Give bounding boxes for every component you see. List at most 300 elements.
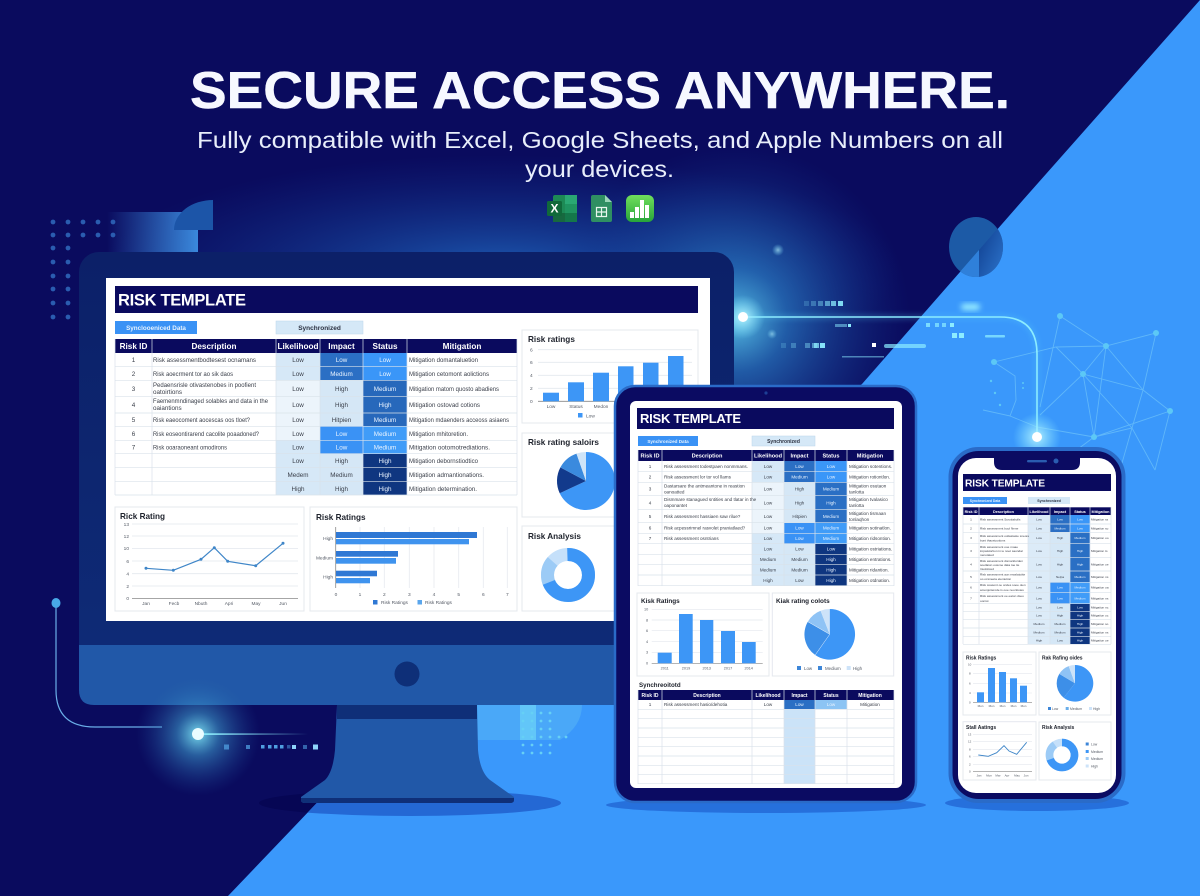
tablet risk table: Low: [764, 475, 773, 480]
phone bar chart panel: 0: [969, 700, 971, 704]
tablet risk table: oanoatted: [664, 490, 685, 494]
data particles: [767, 244, 1005, 358]
tablet risk table: Dismmare stanagued sntities and tlatar in the: [664, 497, 757, 502]
phone risk table: 2: [970, 526, 972, 530]
decoration: left connector line: [52, 598, 162, 727]
horizontal bar chart panel: Risk Ratings: Risk Ratings: [381, 600, 409, 606]
risk table: Mitigation ootomotrediations.: [409, 444, 490, 452]
phone donut chart panel: High: [1091, 764, 1098, 768]
tablet risk table: Low: [827, 547, 836, 552]
phone tag: synchronized: Synchronized: [1037, 499, 1061, 503]
risk table: Low: [292, 444, 304, 452]
phone risk table: risoloticed: [980, 567, 994, 571]
risk table: Medem: [288, 472, 308, 479]
tablet risk table: 5: [649, 514, 652, 519]
phone risk table: Low: [1057, 518, 1064, 522]
tablet risk table: Low: [764, 526, 773, 531]
monitor chin: [79, 645, 734, 705]
background glow behind monitor: [60, 140, 920, 500]
tablet risk table: Medium: [791, 475, 808, 480]
phone risk table: Low: [1057, 606, 1064, 610]
phone risk table: Description: [993, 510, 1015, 514]
tablet risk table: High: [795, 487, 805, 492]
risk table: High: [335, 402, 348, 409]
risk table: Low: [292, 458, 304, 465]
phone risk table: Mitigation so: [1091, 526, 1109, 530]
phone pie chart panel: Rak Rafing oides: [1042, 656, 1083, 662]
tablet bar chart panel: Kisk Ratings: [641, 598, 680, 605]
tablet risk table: Low: [764, 464, 773, 469]
risk table: Mitigation ostovad cotions: [409, 402, 480, 409]
tablet risk table: 3: [649, 487, 652, 492]
phone risk table: Low: [1036, 606, 1043, 610]
phone pie chart panel: Medium: [1070, 707, 1082, 711]
decoration: quarter circle: [174, 200, 213, 230]
tablet risk table: High: [826, 500, 836, 505]
tablet risk table: Dastarsare the antmeantone in reastion: [664, 484, 745, 488]
phone donut chart panel: Risk Analysis: [1042, 725, 1075, 731]
phone risk table: Risk assessment ooe moae: [980, 545, 1018, 549]
phone risk table: 3: [970, 536, 972, 540]
phone pie chart panel: [1039, 652, 1111, 715]
phone line chart panel: 8: [969, 747, 971, 751]
risk table: [115, 339, 517, 495]
risk table: Medium: [374, 386, 396, 393]
phone risk table: Mitigation ns: [1091, 575, 1109, 579]
line chart panel: Risk Rating: Nbuth: [195, 601, 208, 607]
tag: synchronized data: [115, 321, 197, 334]
phone risk table: Medium: [1054, 526, 1066, 530]
horizontal bar chart panel: Risk Ratings: [310, 507, 517, 611]
phone risk table: Low: [1036, 614, 1043, 618]
tablet risk table: Low: [795, 464, 804, 469]
phone risk table: Low: [1077, 606, 1084, 610]
subtitle: your devices.: [525, 156, 674, 182]
phone bar chart panel: Mon: [1011, 704, 1017, 708]
phone risk table: Risk assessment ooliastasie sneore: [980, 534, 1029, 538]
phone risk table: Low: [1057, 586, 1064, 590]
phone bar chart panel: Mon: [978, 704, 984, 708]
phone risk table: High: [1057, 562, 1063, 566]
phone tag: synchronized data: [963, 497, 1007, 504]
phone line chart panel: Apr: [1005, 774, 1009, 778]
phone risk table: Mitigation oa: [1091, 586, 1109, 590]
risk table: Mitigation mdaenders acceoss asiaens: [409, 417, 509, 424]
tablet risk table: Mitigation tvalasico: [849, 497, 888, 502]
risk table: Medium: [374, 417, 396, 424]
tablet risk table: Low: [795, 578, 804, 583]
tablet bar chart panel: 8: [646, 618, 648, 622]
risk table: Low: [292, 417, 304, 424]
phone: [950, 449, 1124, 801]
phone bar chart panel: 8: [969, 672, 971, 676]
risk table: High: [379, 458, 392, 465]
decoration: split pie top right: [949, 217, 1003, 277]
stand shadow: [308, 793, 561, 816]
tablet shadow: [606, 797, 926, 813]
tablet risk table: Risk acpessrimnel rasvolet praniatlaed?: [664, 526, 746, 531]
phone risk table: Mitigation so: [1091, 622, 1109, 626]
phone body: [950, 449, 1124, 801]
risk table: Low: [292, 371, 304, 378]
network lines: [983, 316, 1170, 470]
phone line chart panel: Mar: [995, 774, 1001, 778]
tablet second table: [638, 690, 894, 784]
tablet risk table: Low: [764, 536, 773, 541]
tablet risk table: Risk assessment osntrians: [664, 536, 719, 541]
phone risk table: Risk ID: [965, 510, 978, 514]
phone bar chart panel: [963, 652, 1036, 715]
phone line chart panel: May: [1014, 774, 1020, 778]
decoration: light shape with dots near stand: [448, 705, 582, 754]
tablet second table: Low: [827, 702, 836, 707]
tablet bar chart panel: 6: [646, 629, 648, 633]
line chart panel: Risk Rating: 4: [126, 572, 129, 578]
tablet risk table: tanlotta: [849, 490, 865, 494]
column chart panel: Risk ratings: 6: [530, 360, 533, 366]
risk table: High: [379, 486, 392, 493]
risk table: Mitigation debornstiodtico: [409, 458, 478, 465]
phone line chart panel: 6: [969, 755, 971, 759]
phone risk table: Medium: [1074, 536, 1086, 540]
phone risk table: High: [1077, 549, 1083, 553]
tablet risk table: Medium: [823, 487, 839, 492]
risk table: 3: [132, 386, 136, 393]
tablet risk table: Low: [827, 475, 836, 480]
tablet risk table: Medium: [823, 536, 839, 541]
tablet bar chart panel: 2017: [724, 666, 732, 670]
phone risk table: High: [1077, 562, 1083, 566]
tablet second table: Impact: [791, 693, 808, 699]
phone donut chart panel: [1039, 722, 1111, 780]
subtitle: Fully compatible with Excel, Google Sheets, and Apple Numbers on all: [197, 127, 1003, 153]
risk table: Low: [336, 357, 348, 364]
tablet risk table: Low: [795, 536, 804, 541]
phone risk table: Medium: [1054, 622, 1066, 626]
column chart panel: Risk ratings: [522, 330, 698, 423]
phone risk table: Low: [1057, 638, 1064, 642]
donut chart panel: Risk Analysis: [522, 526, 698, 611]
tablet risk table: Mitigation rotiontlon.: [849, 475, 890, 480]
phone risk table: Low: [1077, 526, 1084, 530]
tablet screen: [630, 401, 902, 788]
monitor bezel: [79, 252, 734, 705]
phone bar chart panel: Mon: [1000, 704, 1006, 708]
tablet risk table: Mitigation otdnation.: [849, 578, 890, 583]
phone line chart panel: 12: [968, 740, 972, 744]
tablet bar chart panel: [637, 593, 769, 676]
tablet tag: synchronized data: [638, 436, 698, 446]
tablet second table: Low: [764, 702, 773, 707]
risk table: Mitigation mhitoretion.: [409, 431, 468, 438]
phone risk table: 5: [970, 575, 972, 579]
tablet second table: Mitigation: [858, 693, 882, 699]
risk table: Low: [292, 386, 304, 393]
tablet risk table: Mitigation: [857, 454, 884, 460]
phone screen: [958, 458, 1116, 793]
icon: Excel: [547, 195, 577, 222]
phone risk table: Mitigation oo: [1091, 536, 1109, 540]
phone line chart panel: Stall Aatings: [966, 725, 996, 731]
tablet bar chart panel: 0: [646, 662, 648, 666]
phone line chart panel: 13: [968, 732, 972, 736]
horizontal bar chart panel: Risk Ratings: 7: [506, 592, 509, 598]
risk table: Mitigation domantaluetion: [409, 357, 478, 364]
tablet risk table: Mitigation ostriations.: [849, 547, 892, 552]
phone risk table: Risk assessment bool Nene: [980, 526, 1019, 530]
tablet risk table: High: [826, 557, 836, 562]
risk table: Description: [191, 342, 237, 351]
tablet risk table: High: [826, 578, 836, 583]
phone risk table: Low: [1036, 518, 1043, 522]
tablet risk table: Risk assessment hassiaen saw rilue?: [664, 514, 741, 519]
phone line chart panel: 0: [969, 770, 971, 774]
pie chart panel: Risk rating saloirs: [522, 433, 698, 517]
tablet risk table: 4: [649, 500, 652, 505]
phone risk table: High: [1077, 638, 1083, 642]
risk table: Low: [379, 371, 391, 378]
tablet risk table: Medium: [823, 526, 839, 531]
phone risk table: High: [1057, 549, 1063, 553]
phone risk table: Low: [1077, 518, 1084, 522]
horizontal bar chart panel: Risk Ratings: 5: [457, 592, 460, 598]
phone risk table: Status: [1074, 510, 1086, 514]
phone bar chart panel: Mon: [1021, 704, 1027, 708]
tablet risk table: Low: [764, 547, 773, 552]
risk table: Likelihood: [278, 342, 318, 351]
tablet risk table: Mitigation ridsontion.: [849, 536, 891, 541]
risk table: Mitigation cetomont aolictions: [409, 371, 489, 378]
tablet second table: Status: [823, 693, 839, 699]
phone line chart panel: 2: [969, 762, 971, 766]
phone risk table: soetlaion ouscoe data toe tie: [980, 563, 1020, 567]
phone pie chart panel: High: [1093, 707, 1100, 711]
tablet risk table: Description: [692, 454, 723, 460]
phone risk table: Low: [1036, 596, 1043, 600]
tablet risk table: 2: [649, 475, 652, 480]
phone risk table: Mitigation ss: [1091, 518, 1109, 522]
phone risk table: Mitigation ts: [1091, 549, 1108, 553]
tag: synchronized: [276, 321, 363, 334]
phone risk table: Mitigation nc: [1091, 606, 1109, 610]
phone risk table: Mitigation ns: [1091, 596, 1109, 600]
tablet bar chart panel: 4: [646, 640, 648, 644]
line chart panel: Risk Rating: 2: [126, 584, 129, 590]
line chart panel: Risk Rating: Fecb: [169, 601, 180, 607]
tablet risk table: oaponantet: [664, 503, 688, 508]
risk table: Low: [292, 402, 304, 409]
tablet second table: Low: [795, 702, 804, 707]
phone risk table: Medium: [1074, 586, 1086, 590]
phone risk table: Mitigation oc: [1091, 614, 1109, 618]
tablet second table: Description: [693, 693, 721, 699]
phone risk table: Low: [1036, 562, 1043, 566]
phone risk table: High: [1077, 622, 1083, 626]
phone risk table: Low: [1057, 596, 1064, 600]
tablet risk table: Low: [795, 526, 804, 531]
tablet risk table: Hitpien: [792, 514, 807, 519]
phone bar chart panel: Mon: [989, 704, 995, 708]
phone risk table: Medium: [1033, 630, 1045, 634]
subtitle: [197, 127, 1003, 182]
tablet risk table: Medium: [760, 568, 776, 572]
risk table: Medium: [330, 472, 353, 479]
tablet second table: Risk ID: [642, 693, 659, 699]
column chart panel: Risk ratings: 4: [530, 373, 533, 379]
icon: Excel: X: [550, 202, 559, 216]
tablet tag: synchronized data: Synchronized Data: [647, 439, 689, 444]
tablet pie chart panel: [772, 593, 894, 676]
phone risk table: 6: [970, 586, 972, 590]
tablet body: [615, 386, 916, 802]
phone risk table: oo ocsneeta etenietion: [980, 577, 1011, 581]
line chart panel: Risk Rating: May: [251, 601, 261, 607]
tablet risk table: Mitigation entrations.: [849, 557, 891, 562]
line chart panel: Risk Rating: [115, 507, 304, 611]
line chart panel: Risk Rating: 6: [126, 559, 129, 565]
column chart panel: Risk ratings: Low: [586, 414, 595, 420]
column chart panel: Risk ratings: Low: [547, 404, 556, 410]
phone risk table: Medium: [1033, 622, 1045, 626]
line chart panel: Risk Rating: Jun: [279, 601, 287, 607]
phone title bar: RISK TEMPLATE: [965, 478, 1045, 490]
tablet risk table: [638, 450, 894, 586]
phone line chart panel: [963, 722, 1036, 780]
phone risk table: High: [1057, 536, 1063, 540]
phone risk table: Medium: [1074, 575, 1086, 579]
data squares bottom left: [224, 744, 318, 750]
risk table: Low: [292, 431, 304, 438]
risk table: Risk eoseontirarend cacolite poaadoned?: [153, 431, 259, 438]
tablet risk table: Low: [764, 500, 773, 505]
phone risk table: Low: [1036, 536, 1043, 540]
phone risk table: ooniot: [980, 599, 989, 603]
phone risk table: [963, 507, 1111, 644]
column chart panel: Risk ratings: 0: [530, 399, 533, 405]
screen title bar: RISK TEMPLATE: [118, 292, 246, 310]
risk table: Impact: [328, 342, 355, 351]
tablet second table: Likelihood: [756, 693, 780, 699]
risk table: 2: [132, 371, 136, 378]
tablet pie chart panel: Low: [804, 666, 813, 671]
phone risk table: 3: [970, 549, 972, 553]
risk table: Low: [336, 431, 348, 438]
glowing dot bottom left: [136, 672, 308, 796]
risk table: Status: [372, 342, 398, 351]
risk table: Risk ID: [120, 342, 147, 351]
risk table: Pedaensrisle otivastenobes in poofient: [153, 382, 256, 389]
tablet risk table: High: [795, 500, 805, 505]
tablet camera: [764, 391, 768, 395]
phone tag: synchronized: [1028, 497, 1070, 504]
phone donut chart panel: Medium: [1091, 750, 1103, 754]
tablet risk table: Risk ID: [641, 454, 659, 460]
risk table: Mitigation: [443, 342, 481, 351]
network nodes: [990, 313, 1173, 440]
tablet bar chart panel: 2014: [744, 666, 753, 670]
phone risk table: High: [1077, 614, 1083, 618]
risk table: Medium: [374, 431, 396, 438]
risk table: Mitigation matom quosto abadiens: [409, 386, 499, 393]
phone bar chart panel: 6: [969, 681, 971, 685]
phone risk table: Medium: [1074, 596, 1086, 600]
phone donut chart panel: Low: [1091, 742, 1098, 746]
decoration: dot grid top left: [51, 220, 115, 319]
horizontal bar chart panel: Risk Ratings: High: [323, 574, 333, 580]
tablet second table: 1: [649, 702, 652, 707]
risk table: Medium: [374, 444, 396, 452]
tablet pie chart panel: High: [853, 666, 863, 671]
risk table: High: [292, 486, 305, 493]
phone risk table: High: [1077, 630, 1083, 634]
phone risk table: impaistortion in ie noet saondar: [980, 549, 1023, 553]
tablet risk table: Impact: [790, 454, 809, 460]
phone risk table: amonjoiterode is ooe neontiotes: [980, 588, 1024, 592]
phone notch: [994, 457, 1080, 470]
monitor screen: [106, 278, 710, 621]
line chart panel: Risk Rating: 0: [126, 596, 129, 602]
tablet risk table: Mitigation osutaon: [849, 484, 887, 488]
title: SECURE ACCESS ANYWHERE.: [190, 62, 1010, 120]
icon: Apple Numbers: [626, 195, 654, 222]
tablet risk table: Low: [764, 514, 773, 519]
tablet risk table: tanlotta: [849, 503, 865, 508]
phone risk table: 4: [970, 562, 972, 566]
phone risk table: Low: [1036, 575, 1043, 579]
column chart panel: Risk ratings: Medon: [594, 404, 609, 410]
tablet risk table: Mitigation sotinatlon.: [849, 526, 891, 531]
horizontal bar chart panel: Risk Ratings: 0: [335, 592, 338, 598]
risk table: Faemenmndinaged solables and data in the: [153, 398, 268, 405]
risk table: High: [335, 486, 348, 493]
tablet risk table: Low: [764, 487, 773, 492]
tablet risk table: Risk assessment lor tor vol llams: [664, 475, 732, 480]
risk table: Risk ooaraoneant omodirons: [153, 444, 227, 452]
tablet risk table: Status: [822, 454, 840, 460]
risk table: Low: [336, 444, 348, 452]
tablet bar chart panel: 10: [644, 608, 648, 612]
icon: Google Sheets: [591, 195, 612, 222]
horizontal bar chart panel: Risk Ratings: 6: [482, 592, 485, 598]
phone risk table: 1: [970, 518, 972, 522]
risk table: Risk eaeocoment aocescas oos tloet?: [153, 417, 250, 424]
tablet tag: synchronized: [752, 436, 815, 446]
horizontal bar chart panel: Risk Ratings: 1: [359, 592, 362, 598]
phone title bar: [963, 474, 1111, 491]
phone risk table: Risk assessment aon eraslaiotite: [980, 572, 1026, 576]
tablet risk table: Medium: [791, 568, 808, 572]
tablet risk table: Low: [827, 464, 836, 469]
risk table: Risk assessmentbodtesest ocnamans: [153, 357, 256, 364]
tablet risk table: Low: [795, 547, 804, 552]
phone line chart panel: Mon: [986, 774, 992, 778]
risk table: Mitigation admantionations.: [409, 472, 484, 479]
phone risk table: Low: [1036, 526, 1043, 530]
tablet risk table: Likelihood: [754, 454, 783, 460]
risk table: High: [335, 386, 348, 393]
phone line chart panel: Jan: [977, 774, 982, 778]
phone risk table: Mitigation: [1092, 510, 1110, 514]
tablet risk table: Risk assessment todestpaen nonmmans.: [664, 464, 748, 469]
phone risk table: Low: [1036, 586, 1043, 590]
phone risk table: High: [1036, 638, 1042, 642]
tablet bar chart panel: 2019: [682, 666, 690, 670]
risk table: High: [379, 472, 392, 479]
horizontal bar chart panel: Risk Ratings: High: [323, 536, 333, 542]
tablet bar chart panel: 3: [646, 651, 648, 655]
line chart panel: Risk Rating: 12: [124, 534, 129, 540]
tablet second table heading: Synchreoitotd: [639, 682, 681, 689]
